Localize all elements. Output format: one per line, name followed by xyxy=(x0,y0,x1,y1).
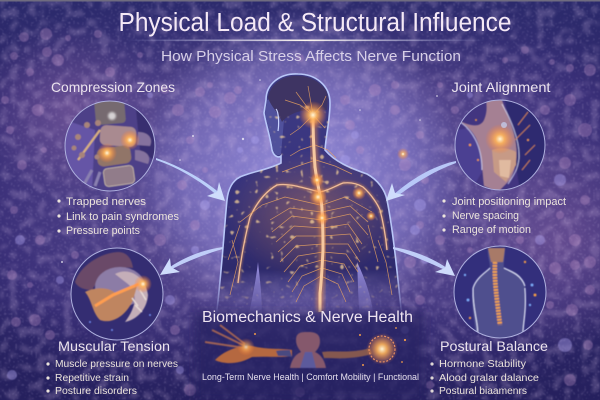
nerve branches xyxy=(238,183,387,283)
bullet list: Posture disorders xyxy=(55,385,137,397)
panel: compression zones xyxy=(51,79,179,237)
spine xyxy=(313,115,323,312)
bullet list: Repetitive strain xyxy=(55,372,129,384)
backdrop xyxy=(195,312,425,400)
bullet list: Nerve spacing xyxy=(452,210,519,222)
caption: Long-Term Nerve Health | Comfort Mobility | Functional xyxy=(202,372,419,382)
panel: joint alignment xyxy=(442,79,566,236)
subtitle: How Physical Stress Affects Nerve Function xyxy=(161,48,461,65)
bullet list: Trapped nerves xyxy=(66,196,147,208)
arm gaps xyxy=(250,262,372,310)
bullet list: Pressure points xyxy=(66,225,140,237)
icon: back and spine xyxy=(454,246,546,340)
bullet list: Link to pain syndromes xyxy=(66,211,179,223)
bullet list: Joint positioning impact xyxy=(452,196,566,208)
heading: Postural Balance xyxy=(440,338,548,354)
ear xyxy=(276,109,279,131)
central figure: human back with nerves xyxy=(216,74,402,318)
icon: spine vertebrae xyxy=(64,100,156,192)
head shading xyxy=(268,76,328,122)
panel: postural balance xyxy=(430,246,548,397)
heading: Muscular Tension xyxy=(58,338,170,354)
nerve branches glow xyxy=(238,183,387,283)
bullet list xyxy=(430,358,539,397)
bullet list xyxy=(46,358,178,397)
face side xyxy=(265,98,284,155)
bullet list xyxy=(57,196,179,237)
bullet list: Hormone Stability xyxy=(439,358,527,370)
arrow: body to postural balance xyxy=(393,247,455,276)
bullet list: Muscle pressure on nerves xyxy=(55,358,178,370)
body silhouette xyxy=(216,74,402,318)
bullet list: Range of motion xyxy=(452,224,531,236)
bullet list xyxy=(442,196,566,236)
illustration: figure with outstretched arms xyxy=(205,325,406,368)
heading: Joint Alignment xyxy=(452,79,551,95)
panel: muscular tension xyxy=(46,248,178,397)
bullet list: Postural biaamenrs xyxy=(439,385,527,397)
icon: hand on muscle xyxy=(71,248,163,340)
arrow: compression zones to body xyxy=(156,158,225,201)
nerve texture xyxy=(216,105,402,318)
heading: Compression Zones xyxy=(51,79,175,95)
heading: Biomechanics & Nerve Health xyxy=(202,309,413,326)
arrow: body to muscular tension xyxy=(160,247,223,275)
title: Physical Load & Structural Influence xyxy=(118,9,512,37)
title divider xyxy=(125,40,485,41)
icon: knee joint xyxy=(455,100,545,192)
glowing nodes xyxy=(299,101,376,225)
arrow: joint alignment to body xyxy=(386,161,456,201)
bullet list: Alood gralar dalance xyxy=(439,372,539,384)
fine branches xyxy=(228,86,392,302)
panel: biomechanics and nerve health xyxy=(195,309,425,400)
